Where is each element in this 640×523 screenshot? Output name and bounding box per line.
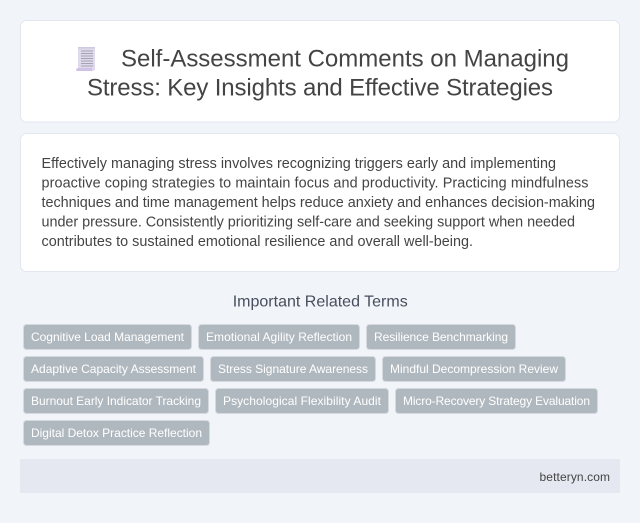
panel: term tags (24, 324, 598, 446)
footer bar (20, 459, 620, 493)
panel: title card (20, 20, 620, 122)
tag: Burnout Early Indicator Tracking: Burnout Early Indicator Tracking (31, 394, 201, 408)
tag: Digital Detox Practice Reflection (24, 420, 210, 446)
tag: Resilience Benchmarking: Resilience Benchmarking (374, 330, 508, 344)
tag: Mindful Decompression Review (382, 356, 566, 382)
tag: Emotional Agility Reflection (198, 324, 360, 350)
title: Stress: Key Insights and Effective Strategies (87, 75, 553, 102)
text block: summary paragraph: contributes to sustained emotional resilience and overall well-being. (42, 234, 473, 250)
tag: Micro-Recovery Strategy Evaluation (396, 388, 598, 414)
tag: Stress Signature Awareness: Stress Signature Awareness (218, 362, 368, 376)
tag: Digital Detox Practice Reflection: Digital Detox Practice Reflection (31, 426, 202, 440)
text block: summary paragraph (42, 156, 595, 250)
tag: Emotional Agility Reflection: Emotional Agility Reflection (206, 330, 352, 344)
text block: summary paragraph: Effectively managing stress involves recognizing triggers early and implementing (42, 156, 556, 172)
text block: summary paragraph: under pressure. Consistently prioritizing self-care and seeking support when needed (42, 214, 575, 230)
footer bar: betteryn.com (540, 470, 610, 484)
title: Self-Assessment Comments on Managing (121, 46, 569, 73)
text block: summary paragraph: techniques and time management helps reduce anxiety and enhances decision-making (42, 195, 595, 211)
tag: Burnout Early Indicator Tracking (24, 388, 208, 414)
icon: scroll document (76, 47, 95, 71)
tag: Psychological Flexibility Audit: Psychological Flexibility Audit (223, 394, 382, 408)
tag: Micro-Recovery Strategy Evaluation: Micro-Recovery Strategy Evaluation (403, 394, 590, 408)
text block: summary paragraph: proactive coping strategies to maintain focus and productivity. Practicing mindfulness (42, 176, 588, 192)
tag: Resilience Benchmarking (366, 324, 516, 350)
tag: Adaptive Capacity Assessment: Adaptive Capacity Assessment (31, 362, 197, 376)
panel: summary (20, 134, 620, 272)
tag: Cognitive Load Management (24, 324, 192, 350)
tag: Mindful Decompression Review: Mindful Decompression Review (390, 362, 558, 376)
tag: Cognitive Load Management: Cognitive Load Management (31, 330, 185, 344)
title (87, 46, 569, 102)
tag: Psychological Flexibility Audit (216, 388, 388, 414)
tag: Adaptive Capacity Assessment (24, 356, 204, 382)
heading: related terms: Important Related Terms (233, 294, 408, 311)
tag: Stress Signature Awareness (210, 356, 376, 382)
